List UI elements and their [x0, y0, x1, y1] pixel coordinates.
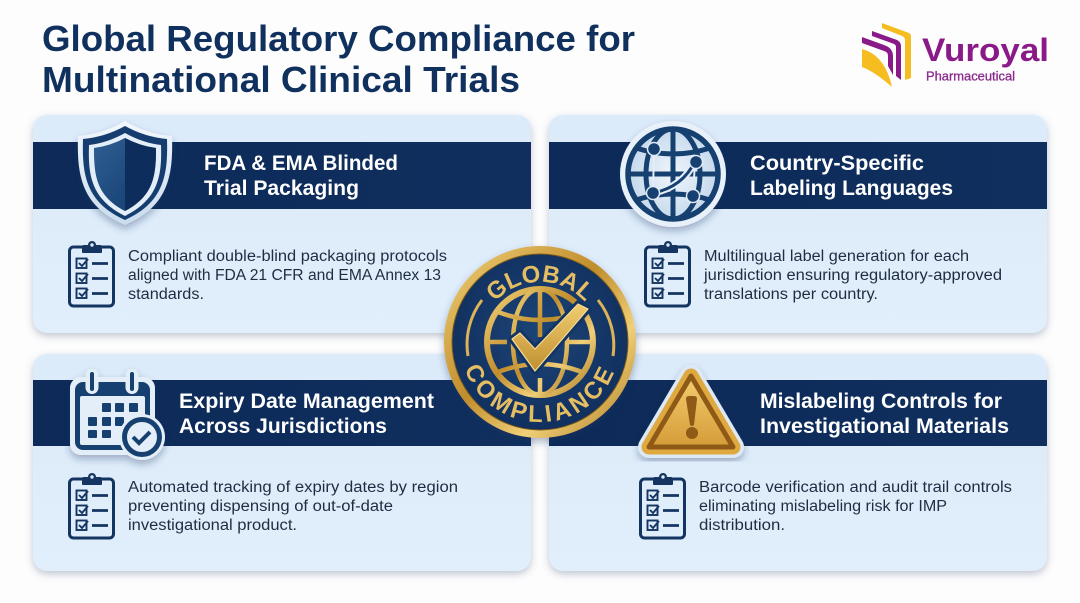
body text [128, 248, 447, 303]
check mark [512, 304, 588, 371]
icon: network globe [620, 121, 726, 227]
body text: eliminating mislabeling risk for IMP [699, 498, 947, 515]
body text: standards. [128, 286, 204, 303]
side arcs [467, 300, 614, 356]
body text: preventing dispensing of out-of-date [128, 498, 393, 515]
body text [699, 479, 1012, 534]
icon: checklist [70, 241, 114, 306]
icon: shield [78, 121, 172, 225]
body text: investigational product. [128, 517, 297, 534]
seal text [466, 265, 614, 422]
body text [128, 479, 458, 534]
heading: FDA and EMA: Trial Packaging [204, 177, 359, 200]
panel: mislabeling controls [549, 354, 1047, 571]
icon: checklist [640, 473, 684, 538]
seal text: GLOBAL [488, 265, 590, 302]
logo: Vuroyal Pharmaceutical: Pharmaceutical [926, 70, 1015, 84]
heading: mislabeling [760, 390, 1009, 438]
body text: Multilingual label generation for each [704, 248, 969, 265]
body text: aligned with FDA 21 CFR and EMA Annex 13 [128, 267, 441, 284]
heading: mislabeling: Investigational Materials [760, 415, 1009, 438]
icon: checklist [646, 241, 690, 306]
body text: distribution. [699, 517, 785, 534]
body text: Barcode verification and audit trail controls [699, 479, 1012, 496]
body text: translations per country. [704, 286, 878, 303]
title: Multinational Clinical Trials [42, 59, 520, 100]
heading: expiry date: Expiry Date Management [179, 390, 434, 413]
heading: country-specific: Labeling Languages [750, 177, 953, 200]
heading: expiry date: Across Jurisdictions [179, 415, 387, 438]
body text: jurisdiction ensuring regulatory-approved [703, 267, 1002, 284]
heading: FDA and EMA [204, 152, 398, 200]
heading: country-specific: Country-Specific [750, 152, 924, 175]
icon: calendar [70, 369, 165, 460]
heading: country-specific [750, 152, 953, 200]
icon: warning triangle [649, 376, 733, 447]
title [42, 18, 635, 100]
globe [487, 289, 593, 395]
panel: expiry date management [33, 354, 531, 571]
body text: Automated tracking of expiry dates by region [128, 479, 458, 496]
title: Global Regulatory Compliance for [42, 18, 635, 59]
panel: FDA and EMA blinded trial packaging [33, 115, 531, 333]
seal text: COMPLIANCE [466, 365, 614, 422]
badge: global compliance seal [439, 245, 641, 447]
heading: mislabeling: Mislabeling Controls for [760, 390, 1002, 413]
heading: FDA and EMA: FDA & EMA Blinded [204, 152, 398, 175]
panel: country-specific labeling languages [549, 115, 1047, 333]
icon: checklist [70, 473, 114, 538]
body text [703, 248, 1002, 303]
body text: Compliant double-blind packaging protocols [128, 248, 447, 265]
heading: expiry date [179, 390, 434, 438]
logo: Vuroyal Pharmaceutical: Vuroyal [922, 32, 1049, 68]
logo: Vuroyal Pharmaceutical [862, 23, 1049, 87]
